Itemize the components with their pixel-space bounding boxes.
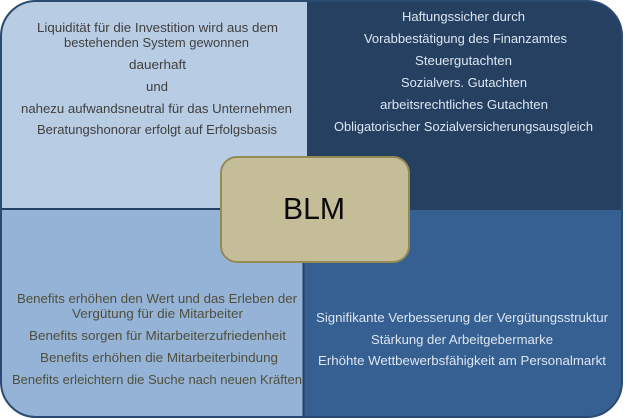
text block: benefits points: Benefits erleichtern die Suche nach neuen Kräften [12,373,302,387]
text block: liquidity points: Liquidität für die Investition wird aus dem [37,21,278,35]
text block: employer attractiveness points: Erhöhte Wettbewerbsfähigkeit am Personalmarkt [318,354,606,368]
panel: bottom left, benefits [0,209,304,419]
text block: liquidity points: nahezu aufwandsneutral für das Unternehmen [21,102,292,116]
text block: liquidity points: dauerhaft [129,58,186,72]
text block: benefits points: Vergütung für die Mitarbeiter [72,307,244,321]
text block: liquidity points: bestehenden System gewonnen [64,36,249,50]
text block: legal certainty points: Haftungssicher durch [402,10,525,24]
text block: employer attractiveness points: Stärkung der Arbeitgebermarke [371,333,553,347]
text block: legal certainty points: Sozialvers. Gutachten [401,76,527,90]
text block: benefits points: Benefits erhöhen den Wert und das Erleben der [17,292,298,306]
text block: legal certainty points [334,10,593,134]
text block: liquidity points: und [146,80,168,94]
text block: liquidity points [21,21,292,137]
text block: benefits points: Benefits sorgen für Mitarbeiterzufriedenheit [29,329,286,343]
text block: legal certainty points: Steuergutachten [415,54,512,68]
center label: BLM [283,191,345,226]
text block: legal certainty points: Vorabbestätigung des Finanzamtes [364,32,567,46]
panel: top left, liquidity [0,0,308,209]
text block: legal certainty points: Obligatorischer Sozialversicherungsausgleich [334,120,593,134]
center box: BLM [221,157,409,262]
text block: employer attractiveness points: Signifikante Verbesserung der Vergütungsstruktur [316,311,609,325]
text block: employer attractiveness points [316,311,609,368]
panel: top right, legal certainty [307,0,627,209]
text block: liquidity points: Beratungshonorar erfolgt auf Erfolgsbasis [37,123,277,137]
text block: benefits points [12,292,302,387]
text block: benefits points: Benefits erhöhen die Mitarbeiterbindung [40,351,278,365]
text block: legal certainty points: arbeitsrechtliches Gutachten [380,98,548,112]
panel: bottom right, employer attractiveness [304,209,627,419]
